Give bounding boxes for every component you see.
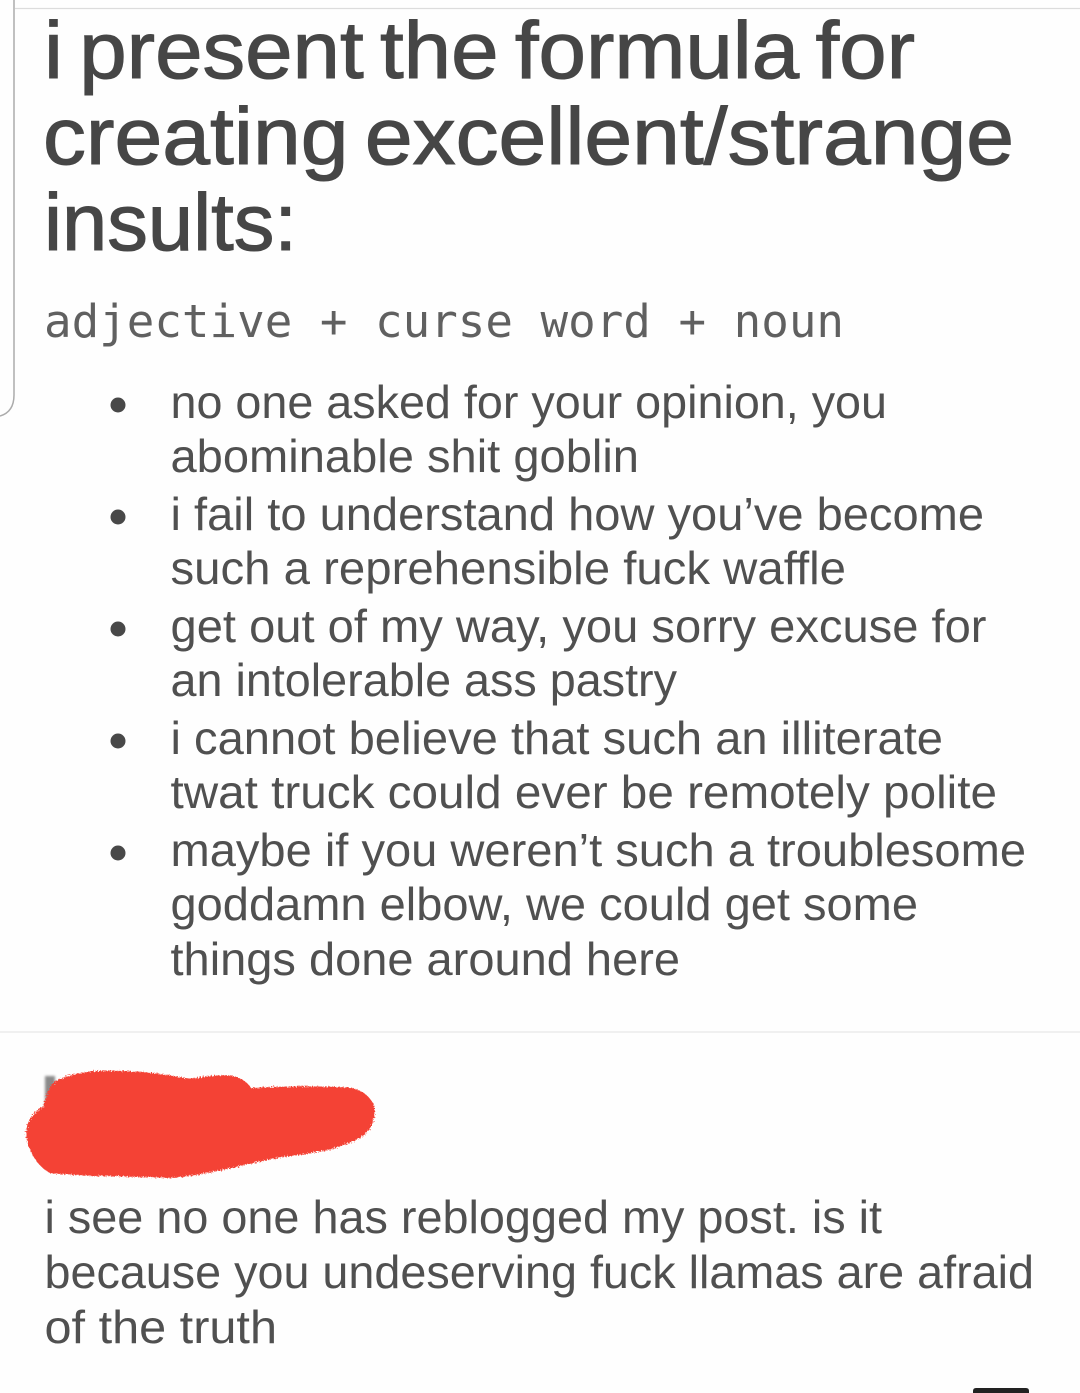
bullet item 3: [110, 600, 986, 706]
reply comment text: because you undeserving fuck llamas are afraid: [44, 1246, 1034, 1298]
reply comment text: of the truth: [44, 1301, 277, 1353]
bullet item 2: [110, 488, 984, 594]
bullet item 5: things done around here: [170, 933, 680, 985]
title: creating excellent/strange: [43, 92, 1014, 182]
bullet item 5: [110, 824, 1026, 985]
bullet item 5: goddamn elbow, we could get some: [170, 878, 918, 930]
cropped dark interface element at bottom edge: [973, 1388, 1029, 1393]
reply comment text: i see no one has reblogged my post. is it: [44, 1191, 882, 1243]
bullet item 2: i fail to understand how you’ve become: [170, 488, 984, 540]
bullet item 1: no one asked for your opinion, you: [170, 376, 887, 428]
reply comment text: [44, 1191, 1034, 1353]
bulleted list of example insults: [110, 376, 1026, 985]
bullet item 5: maybe if you weren’t such a troublesome: [170, 824, 1026, 876]
bullet item 4: [110, 712, 997, 818]
bullet item 1: [110, 376, 887, 482]
bullet item 1: abominable shit goblin: [170, 430, 639, 482]
title: [43, 6, 1014, 268]
bullet item 3: an intolerable ass pastry: [170, 654, 677, 706]
bullet item 4: i cannot believe that such an illiterate: [170, 712, 943, 764]
redacted username scribble: [26, 1071, 375, 1178]
bullet item 2: such a reprehensible fuck waffle: [170, 542, 846, 594]
bullet item 4: twat truck could ever be remotely polite: [170, 766, 997, 818]
bullet item 3: get out of my way, you sorry excuse for: [170, 600, 986, 652]
title: i present the formula for: [44, 6, 915, 96]
formula text: adjective + curse word + noun: [44, 295, 844, 348]
title: insults:: [44, 178, 297, 268]
